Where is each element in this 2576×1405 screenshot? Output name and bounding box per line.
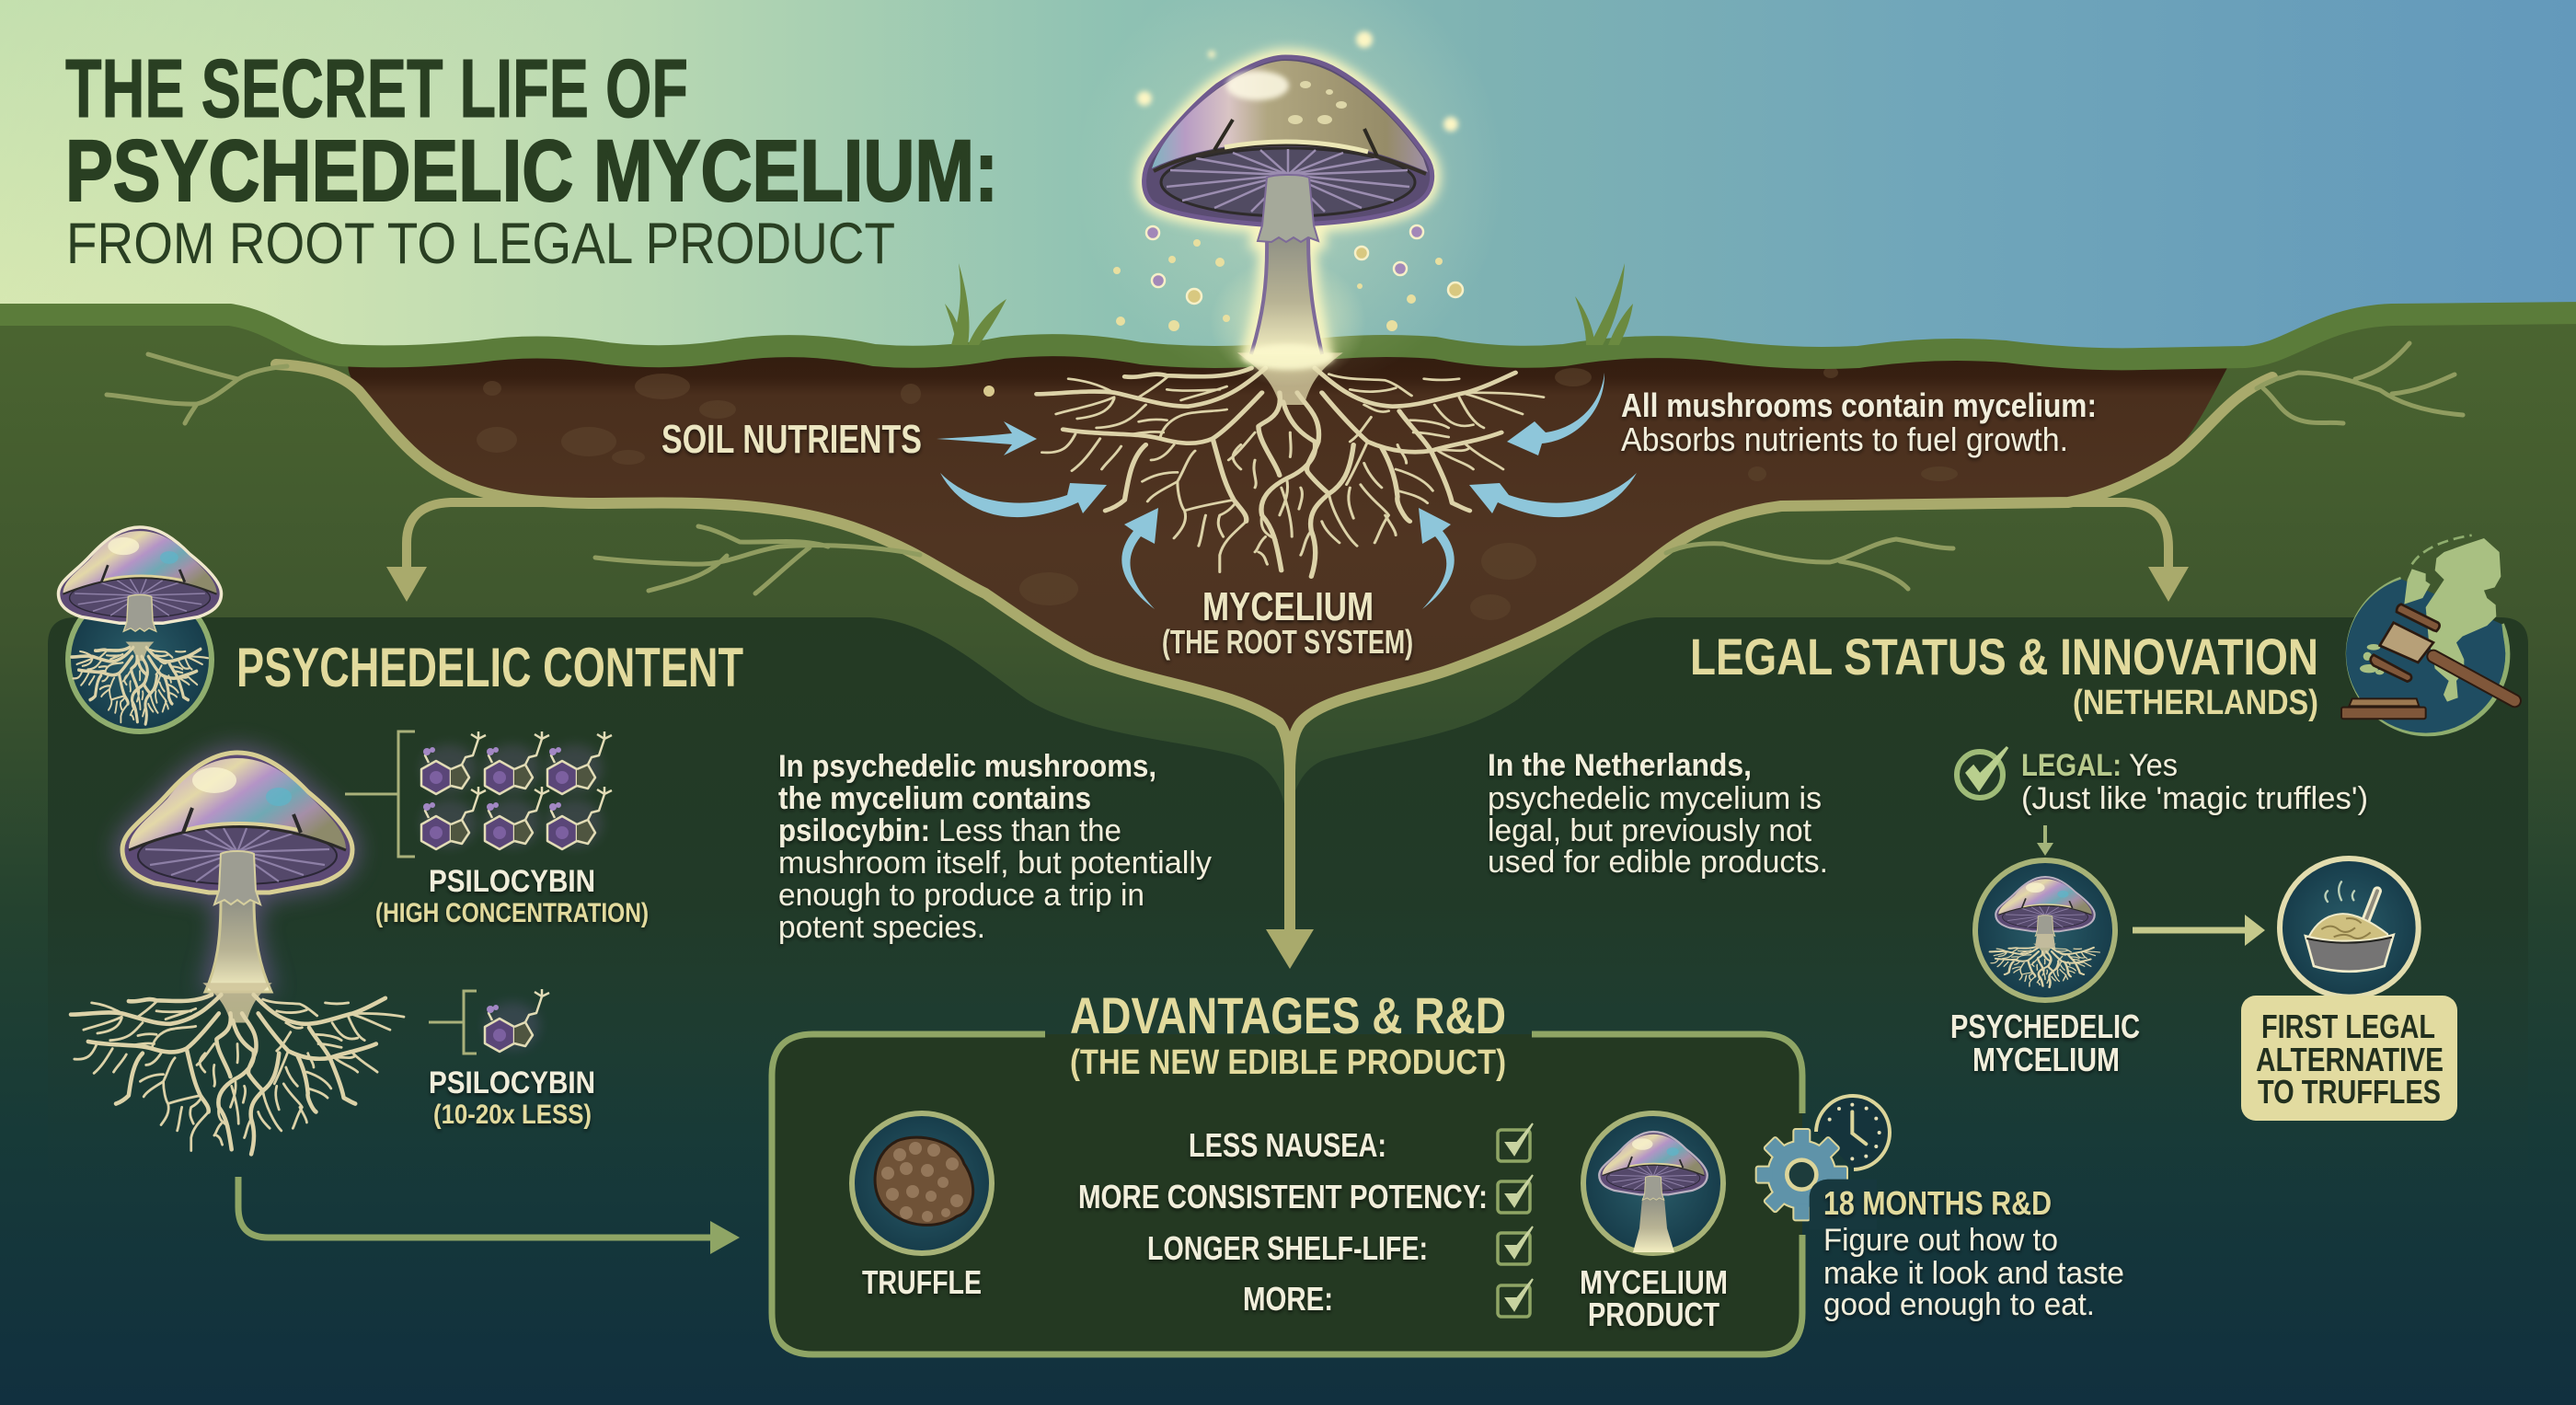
subheading: (NETHERLANDS) [2073,684,2318,722]
psychedelic body text: enough to produce a trip in [778,878,1144,913]
callout: first legal alternative: TO TRUFFLES [2258,1073,2441,1111]
surface grass band [0,313,2576,359]
icon: mycelium product [1583,1113,1723,1253]
netherlands body text: In the Netherlands, [1488,748,1752,783]
label: mycelium product: MYCELIUM [1580,1263,1728,1301]
icon: legal check [1957,747,2007,798]
outer root branches [107,343,2463,593]
cap [1144,57,1432,225]
R&D text block: 18 MONTHS R&D [1823,1184,2052,1222]
box [772,1034,1802,1354]
label: psychedelic mycelium: MYCELIUM [1972,1041,2120,1078]
icon: psychedelic mycelium [1975,860,2115,1000]
soil nutrient arrows [937,373,1637,609]
checkmarks [1498,1123,1533,1317]
heading: LEGAL STATUS & INNOVATION [1690,628,2318,685]
small down arrow [2037,825,2053,856]
netherlands body text: used for edible products. [1488,845,1828,880]
mycelium intro text: Absorbs nutrients to fuel growth. [1621,420,2068,458]
title: FROM ROOT TO LEGAL PRODUCT [66,212,895,276]
psychedelic body text: mushroom itself, but potentially [778,846,1212,881]
callout: first legal alternative: ALTERNATIVE [2256,1041,2444,1078]
legal text: Yes [2129,748,2178,783]
advantages list: LESS NAUSEA: [1189,1126,1386,1164]
label: psilocybin less: (10-20x LESS) [433,1100,592,1130]
icon: truffle [852,1113,992,1253]
heading: PSYCHEDELIC CONTENT [236,637,743,698]
mycelium root system label [1162,584,1413,661]
panel background [48,617,2528,1196]
mycelium intro text: All mushrooms contain mycelium: [1621,386,2097,424]
left branch [407,502,543,575]
psychedelic body text: In psychedelic mushrooms, [778,749,1156,784]
legal text: LEGAL: [2021,748,2122,783]
label: mycelium product: PRODUCT [1588,1296,1719,1333]
callout: first legal alternative: FIRST LEGAL [2261,1008,2435,1045]
soil cross-section [348,345,2231,732]
grass tufts [945,263,1633,345]
icon: gear and clock [1757,1096,1890,1230]
legal text [2021,748,2368,816]
psychedelic body text: the mycelium contains [778,781,1091,816]
label: psychedelic mycelium: PSYCHEDELIC [1950,1008,2140,1045]
panel: psychedelic content [59,527,1212,1254]
arrow to legal alternative [2133,915,2265,946]
title [65,43,998,276]
label: mycelium product [1580,1263,1728,1333]
central root system [1037,352,1544,577]
psychedelic body text [778,749,1212,945]
R&D text block: good enough to eat. [1823,1287,2095,1322]
right branch arrowhead [2148,567,2189,602]
panel: advantages and R&D [772,986,1802,1354]
label: psilocybin less: PSILOCYBIN [429,1065,595,1100]
psychedelic body text: psilocybin: [778,813,930,848]
large root system [71,983,404,1154]
advantages list: MORE: [1243,1280,1333,1318]
psychedelic body text: potent species. [778,910,985,945]
soil nutrients label: SOIL NUTRIENTS [661,417,922,462]
advantages list: LONGER SHELF-LIFE: [1147,1229,1428,1267]
advantages list [1078,1126,1488,1318]
R&D text block: Figure out how to [1823,1223,2058,1258]
title: PSYCHEDELIC MYCELIUM: [65,122,998,220]
label: psilocybin less [429,1065,595,1130]
R&D text block [1823,1184,2124,1322]
right main root line [1290,377,2272,773]
legal text: (Just like 'magic truffles') [2021,781,2368,816]
panel: legal status and innovation [1488,536,2514,1121]
icon: mushroom with roots [59,527,221,731]
mycelium network lines [107,343,2463,939]
central glowing mushroom [1074,0,1506,391]
heading: ADVANTAGES & R&D [1070,986,1506,1044]
sky background [0,0,2576,368]
psychedelic body text: Less than the [938,813,1121,848]
subheading: (THE NEW EDIBLE PRODUCT) [1070,1043,1506,1082]
arrow to advantages [238,1177,740,1254]
spore particles [1113,31,1463,331]
ground and lower background [0,313,2576,1405]
central arrowhead [1266,929,1314,969]
R&D text block: make it look and taste [1823,1256,2124,1291]
advantages list: MORE CONSISTENT POTENCY: [1078,1178,1488,1215]
label: psychedelic mycelium [1950,1008,2140,1078]
mycelium intro text [1621,386,2097,458]
callout: first legal alternative [2241,996,2457,1121]
label: psilocybin high concentration: (HIGH CONCENTRATION) [375,898,649,928]
label: psilocybin high concentration [375,864,649,928]
left main root line [276,364,1290,773]
stem top with skirt [1258,175,1318,242]
label: psilocybin high concentration: PSILOCYBIN [429,864,595,899]
label: truffle: TRUFFLE [862,1263,982,1301]
netherlands body text: psychedelic mycelium is [1488,781,1822,816]
molecule cluster: high concentration [345,731,612,857]
stem [1251,237,1322,354]
netherlands body text [1488,748,1828,880]
large psychedelic mushroom [122,753,352,992]
right branch [2033,502,2168,575]
icon: netherlands map and gavel [2341,536,2514,734]
molecule: low concentration [429,989,549,1054]
central stem line [1284,764,1295,939]
netherlands body text: legal, but previously not [1488,813,1812,848]
left branch arrowhead [386,567,427,602]
icon: food bowl [2280,858,2419,997]
title: THE SECRET LIFE OF [65,43,688,135]
mycelium root system label: (THE ROOT SYSTEM) [1162,623,1413,661]
mycelium root system label: MYCELIUM [1202,584,1374,629]
